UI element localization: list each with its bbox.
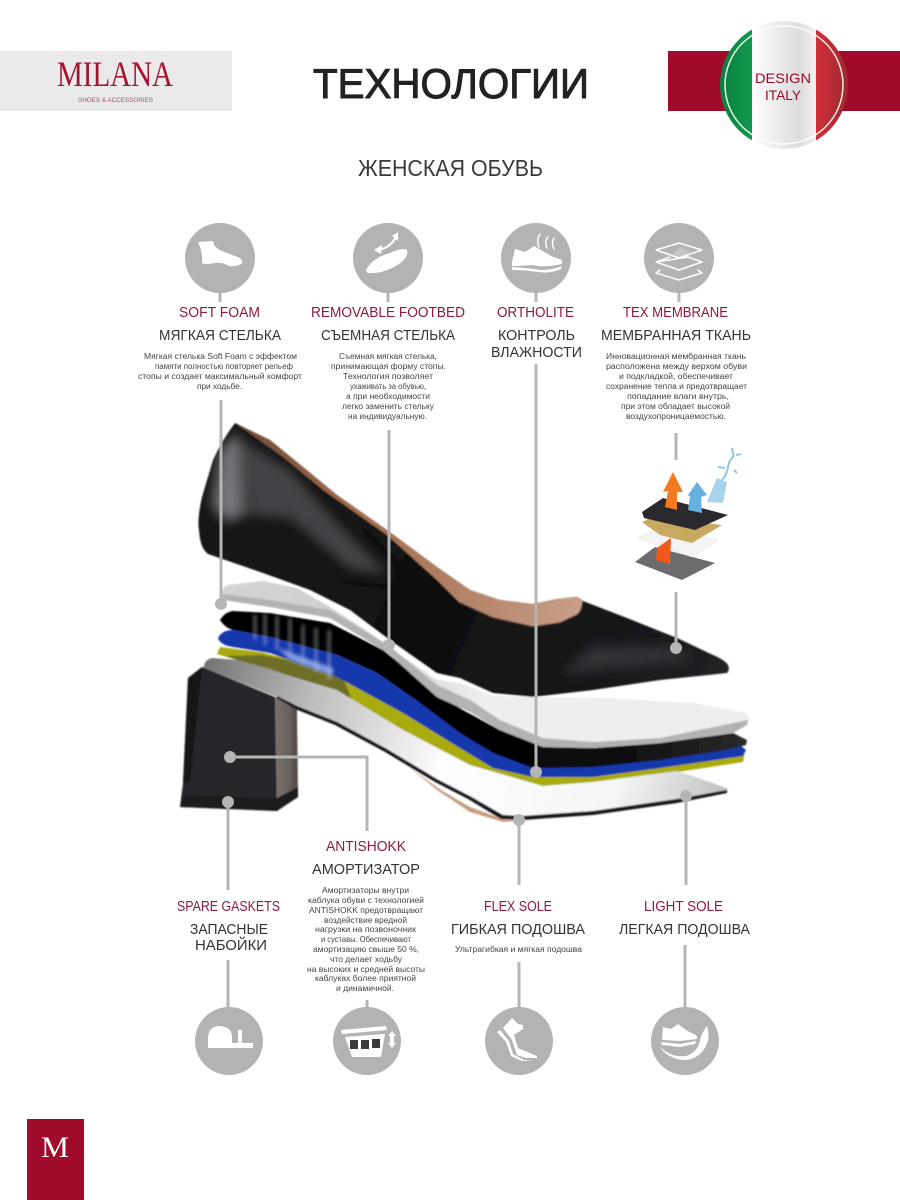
- heading en: FLEX SOLE: [484, 899, 552, 915]
- description: воздействие вредной: [324, 916, 407, 925]
- heading ru: МЕМБРАННАЯ ТКАНЬ: [601, 327, 751, 344]
- description: памяти полностью повторяет рельеф: [155, 362, 293, 371]
- heading en: REMOVABLE FOOTBED: [311, 305, 465, 321]
- subtitle: ЖЕНСКАЯ ОБУВЬ: [358, 155, 543, 181]
- badge text: DESIGN: [755, 70, 811, 86]
- shoe exploded view: [180, 423, 749, 822]
- icon: insole: [353, 223, 423, 293]
- layer streaks: [255, 614, 333, 680]
- feature: flex sole: [451, 899, 585, 1075]
- spare gaskets pointer: [222, 796, 234, 1008]
- soft foam pointer: [215, 400, 227, 610]
- heading ru second line: ВЛАЖНОСТИ: [491, 344, 582, 361]
- heading en: SPARE GASKETS: [177, 899, 280, 915]
- removable footbed pointer: [383, 430, 395, 651]
- footer brand mark: [27, 1119, 84, 1200]
- feature: ortholite: [491, 223, 582, 361]
- description: на индивидуальную.: [348, 412, 427, 421]
- description: каблука обуви с технологией: [308, 896, 424, 905]
- description: стопы и создает максимальный комфорт: [138, 372, 302, 381]
- heading ru: ГИБКАЯ ПОДОШВА: [451, 921, 585, 938]
- gray layer: [635, 547, 715, 580]
- description: нагрузки на позвоночник: [315, 925, 417, 934]
- description: расположена между верхом обуви: [606, 362, 747, 371]
- description: ухаживать за обувью,: [350, 382, 426, 391]
- icon: heel tips: [195, 1007, 263, 1075]
- icon: flexing shoe: [485, 1007, 553, 1075]
- flex sole pointer: [513, 814, 525, 1008]
- insole: [222, 581, 749, 748]
- block heel: [180, 667, 298, 811]
- membrane layers illustration: [635, 448, 741, 580]
- title: ТЕХНОЛОГИИ: [313, 60, 589, 107]
- feature: light sole: [619, 899, 750, 1075]
- description: [138, 352, 302, 391]
- heading en: ANTISHOKK: [326, 839, 406, 855]
- gold mesh layer: [642, 517, 722, 543]
- heading ru: МЯГКАЯ СТЕЛЬКА: [159, 327, 281, 344]
- icon: foot: [185, 223, 255, 293]
- icon: shock absorber: [333, 1007, 401, 1075]
- description: что делает ходьбу: [330, 955, 402, 964]
- feature: tex membrane: [601, 223, 751, 421]
- heading ru: СЪЕМНАЯ СТЕЛЬКА: [321, 327, 455, 344]
- feature: antishokk: [307, 839, 425, 1075]
- panel: logo: [0, 51, 232, 111]
- description: воздухопроницаемостью.: [626, 412, 726, 421]
- blue layer: [218, 630, 746, 777]
- description: легко заменить стельку: [342, 402, 434, 411]
- connector lines and dots: [215, 290, 692, 1008]
- heading ru: ЗАПАСНЫЕ: [190, 921, 268, 938]
- description: и суставы. Обеспечивают: [321, 935, 411, 944]
- description: [606, 352, 747, 421]
- icon: shoe and feather: [651, 1007, 719, 1075]
- description: Ультрагибкая и мягкая подошва: [455, 945, 583, 954]
- icon: layers: [644, 223, 714, 293]
- description: Технология позволяет: [343, 372, 433, 381]
- heading ru: КОНТРОЛЬ: [498, 327, 575, 344]
- description: амортизацию свыше 50 %,: [313, 945, 419, 954]
- orange arrow lower: [656, 538, 671, 564]
- description: Мягкая стелька Soft Foam с эффектом: [144, 352, 297, 361]
- brand name: MILANA: [57, 54, 173, 94]
- icon: breathable shoe: [501, 223, 571, 293]
- description: Инновационная мембранная ткань: [606, 352, 746, 361]
- description: ANTISHOKK предотвращают: [309, 906, 423, 915]
- description: сохранение тепла и предотвращает: [606, 382, 747, 391]
- heading en: SOFT FOAM: [179, 305, 260, 321]
- description: и динамичной.: [336, 984, 394, 993]
- description: попадание влаги внутрь,: [627, 392, 729, 401]
- description: при этом обладает высокой: [621, 402, 730, 411]
- description: а при необходимости: [346, 392, 430, 401]
- description: Амортизаторы внутри: [322, 886, 409, 895]
- badge text second line: ITALY: [765, 87, 802, 103]
- description: на высоких и средней высоты: [307, 965, 425, 974]
- shoe upper: [198, 423, 729, 697]
- splash: [707, 448, 741, 503]
- description: Съемная мягкая стелька,: [339, 352, 437, 361]
- brand tagline: SHOES & ACCESSORIES: [78, 97, 154, 104]
- heading en: TEX MEMBRANE: [623, 305, 728, 321]
- black layer: [642, 498, 728, 530]
- antishokk pointer: [224, 751, 367, 1008]
- heading ru: АМОРТИЗАТОР: [312, 861, 420, 878]
- blue arrow: [688, 482, 707, 513]
- description: принимающая форму стопы.: [331, 362, 446, 371]
- feature: removable footbed: [311, 223, 465, 421]
- olive layer: [217, 647, 744, 786]
- light sole pointer: [680, 790, 692, 1008]
- description: при ходьбе.: [197, 382, 242, 391]
- ortholite pointer: [530, 364, 542, 778]
- white layer: [637, 528, 718, 557]
- shoe highlights: [212, 432, 690, 675]
- feature: spare gaskets: [177, 899, 280, 1075]
- heading ru second line: НАБОЙКИ: [195, 936, 267, 954]
- description: каблуках более приятной: [315, 974, 416, 983]
- badge: design italy: [668, 21, 900, 149]
- heading ru: ЛЕГКАЯ ПОДОШВА: [619, 921, 750, 938]
- description: [331, 352, 446, 421]
- heading en: LIGHT SOLE: [644, 899, 723, 915]
- brand letter: M: [41, 1131, 69, 1164]
- tex membrane pointer: [670, 433, 682, 654]
- description: [307, 886, 425, 993]
- shoe lining: [235, 423, 583, 627]
- heading en: ORTHOLITE: [497, 305, 574, 321]
- orange arrow: [663, 472, 683, 510]
- feature: soft foam: [138, 223, 302, 391]
- black layer: [220, 611, 747, 768]
- description: и подкладкой, обеспечивает: [619, 372, 733, 381]
- outsole: [204, 658, 728, 822]
